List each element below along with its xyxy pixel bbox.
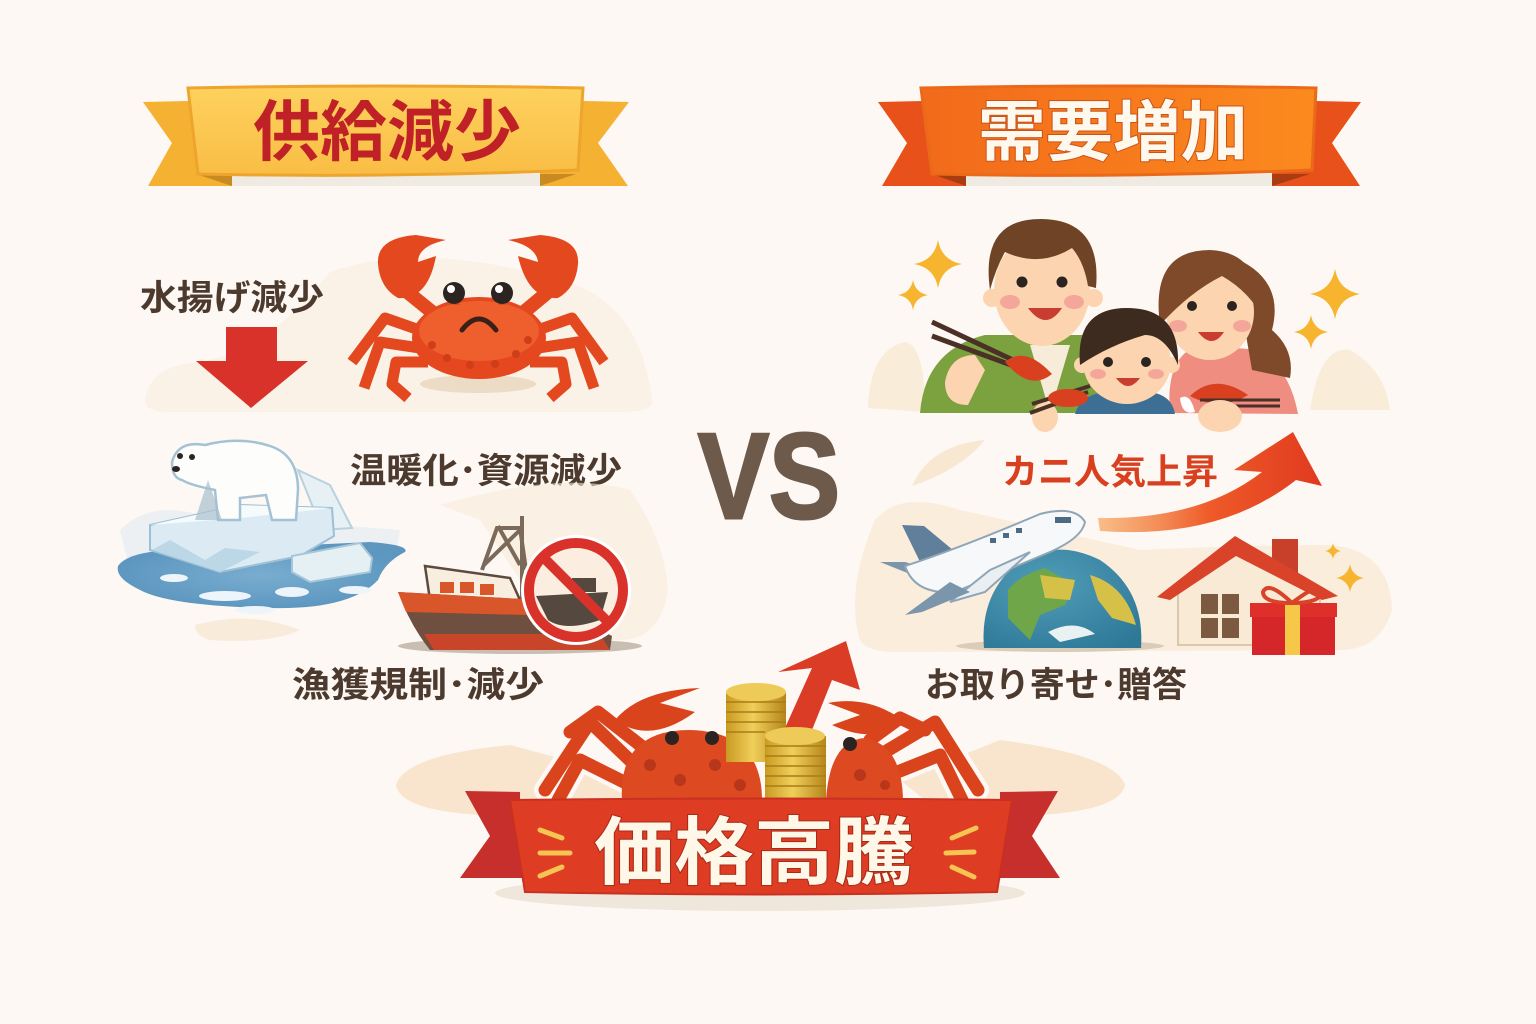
banner: 価格高騰: [460, 791, 1060, 911]
arrow: price rising: [778, 641, 860, 730]
decorative wash: left top: [145, 258, 652, 412]
VS: VS: [698, 408, 840, 544]
icon: down arrow: [196, 327, 308, 408]
icon: house and gift: [1157, 536, 1364, 655]
icon: airplane: [880, 511, 1085, 615]
text: カニ人気上昇: カニ人気上昇: [1002, 453, 1218, 492]
icon: globe: [956, 550, 1164, 652]
text: お取り寄せ・贈答: お取り寄せ･贈答: [925, 666, 1187, 705]
icons: burst lines: [540, 828, 976, 877]
icon: polar bear on ice: [118, 441, 406, 614]
icons: sparkles family: [898, 240, 1360, 349]
text: 漁獲規制・減少: 漁獲規制･減少: [292, 666, 544, 705]
text: 温暖化・資源減少: 温暖化･資源減少: [350, 452, 622, 491]
text: 水揚げ減少: 水揚げ減少: [140, 279, 324, 318]
heading: supply: 供給減少: [253, 95, 521, 169]
icon: sad crab: [352, 235, 604, 398]
banner: 供給減少: [143, 86, 629, 186]
heading: price surge: 価格高騰: [594, 811, 914, 894]
icon: crabs and coins: [545, 683, 978, 802]
icon: family eating crab: [920, 219, 1298, 432]
banner: 需要増加: [878, 86, 1361, 186]
decorative wash: left mid: [440, 483, 668, 640]
icon: fishing boat with prohibition sign: [398, 516, 642, 654]
arrow: rising popularity: [1098, 432, 1322, 532]
decorative wash: right mid: [855, 502, 1392, 652]
decorative wash: bottom: [396, 740, 1125, 820]
decorative wash: right top: [868, 342, 1390, 412]
decorative wash: left bottom: [195, 619, 300, 641]
white halo: [545, 712, 978, 800]
heading: demand: 需要増加: [978, 95, 1248, 169]
